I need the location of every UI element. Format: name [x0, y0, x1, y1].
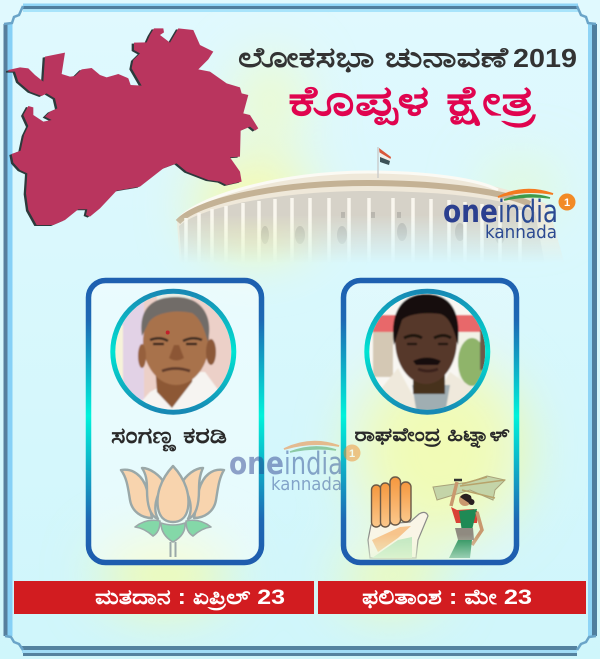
oneindia kannada watermark: kannada: [271, 474, 342, 495]
oneindia kannada watermark: 1: [349, 448, 355, 460]
portrait: Sanganna Karadi: [110, 288, 240, 416]
oneindia kannada watermark: [229, 442, 360, 495]
icon: BJP lotus: [121, 466, 224, 557]
constituency heading: ಕೊಪ್ಪಳ ಕ್ಷೇತ್ರ: [288, 77, 536, 128]
icon: Congress hand: [368, 477, 428, 558]
parliament building: [177, 172, 565, 265]
flag on parliament: [378, 147, 391, 178]
title: [238, 42, 577, 73]
candidate name: ರಾಘವೇಂದ್ರ ಹಿಟ್ನಾಳ್: [354, 425, 510, 449]
icon: JD(S) woman farmer: [433, 476, 505, 558]
oneindia kannada watermark: india: [284, 446, 343, 482]
oneindia kannada logo: 1: [564, 197, 570, 209]
panel: candidate 1 card: [88, 280, 262, 562]
oneindia kannada logo: india: [498, 194, 558, 230]
oneindia kannada watermark: one: [229, 446, 284, 482]
oneindia kannada logo: kannada: [485, 222, 557, 243]
candidate name: ಸಂಗಣ್ಣ ಕರಡಿ: [111, 423, 227, 452]
oneindia kannada logo: one: [443, 194, 498, 230]
polling date bar: ಮತದಾನ : ಏಪ್ರಿಲ್ 23: [95, 586, 285, 611]
result date bar: [318, 581, 586, 614]
panel: candidate 2 card: [344, 280, 516, 562]
oneindia kannada logo: [443, 190, 576, 243]
polling date bar: [14, 581, 314, 614]
title: 2019: [513, 43, 577, 73]
map of Koppal district: [6, 28, 258, 226]
title: ಲೋಕಸಭಾ ಚುನಾವಣೆ: [238, 42, 509, 73]
portrait: Raghavendra Hitnal: [365, 288, 490, 416]
result date bar: ಫಲಿತಾಂಶ : ಮೇ 23: [362, 586, 532, 609]
